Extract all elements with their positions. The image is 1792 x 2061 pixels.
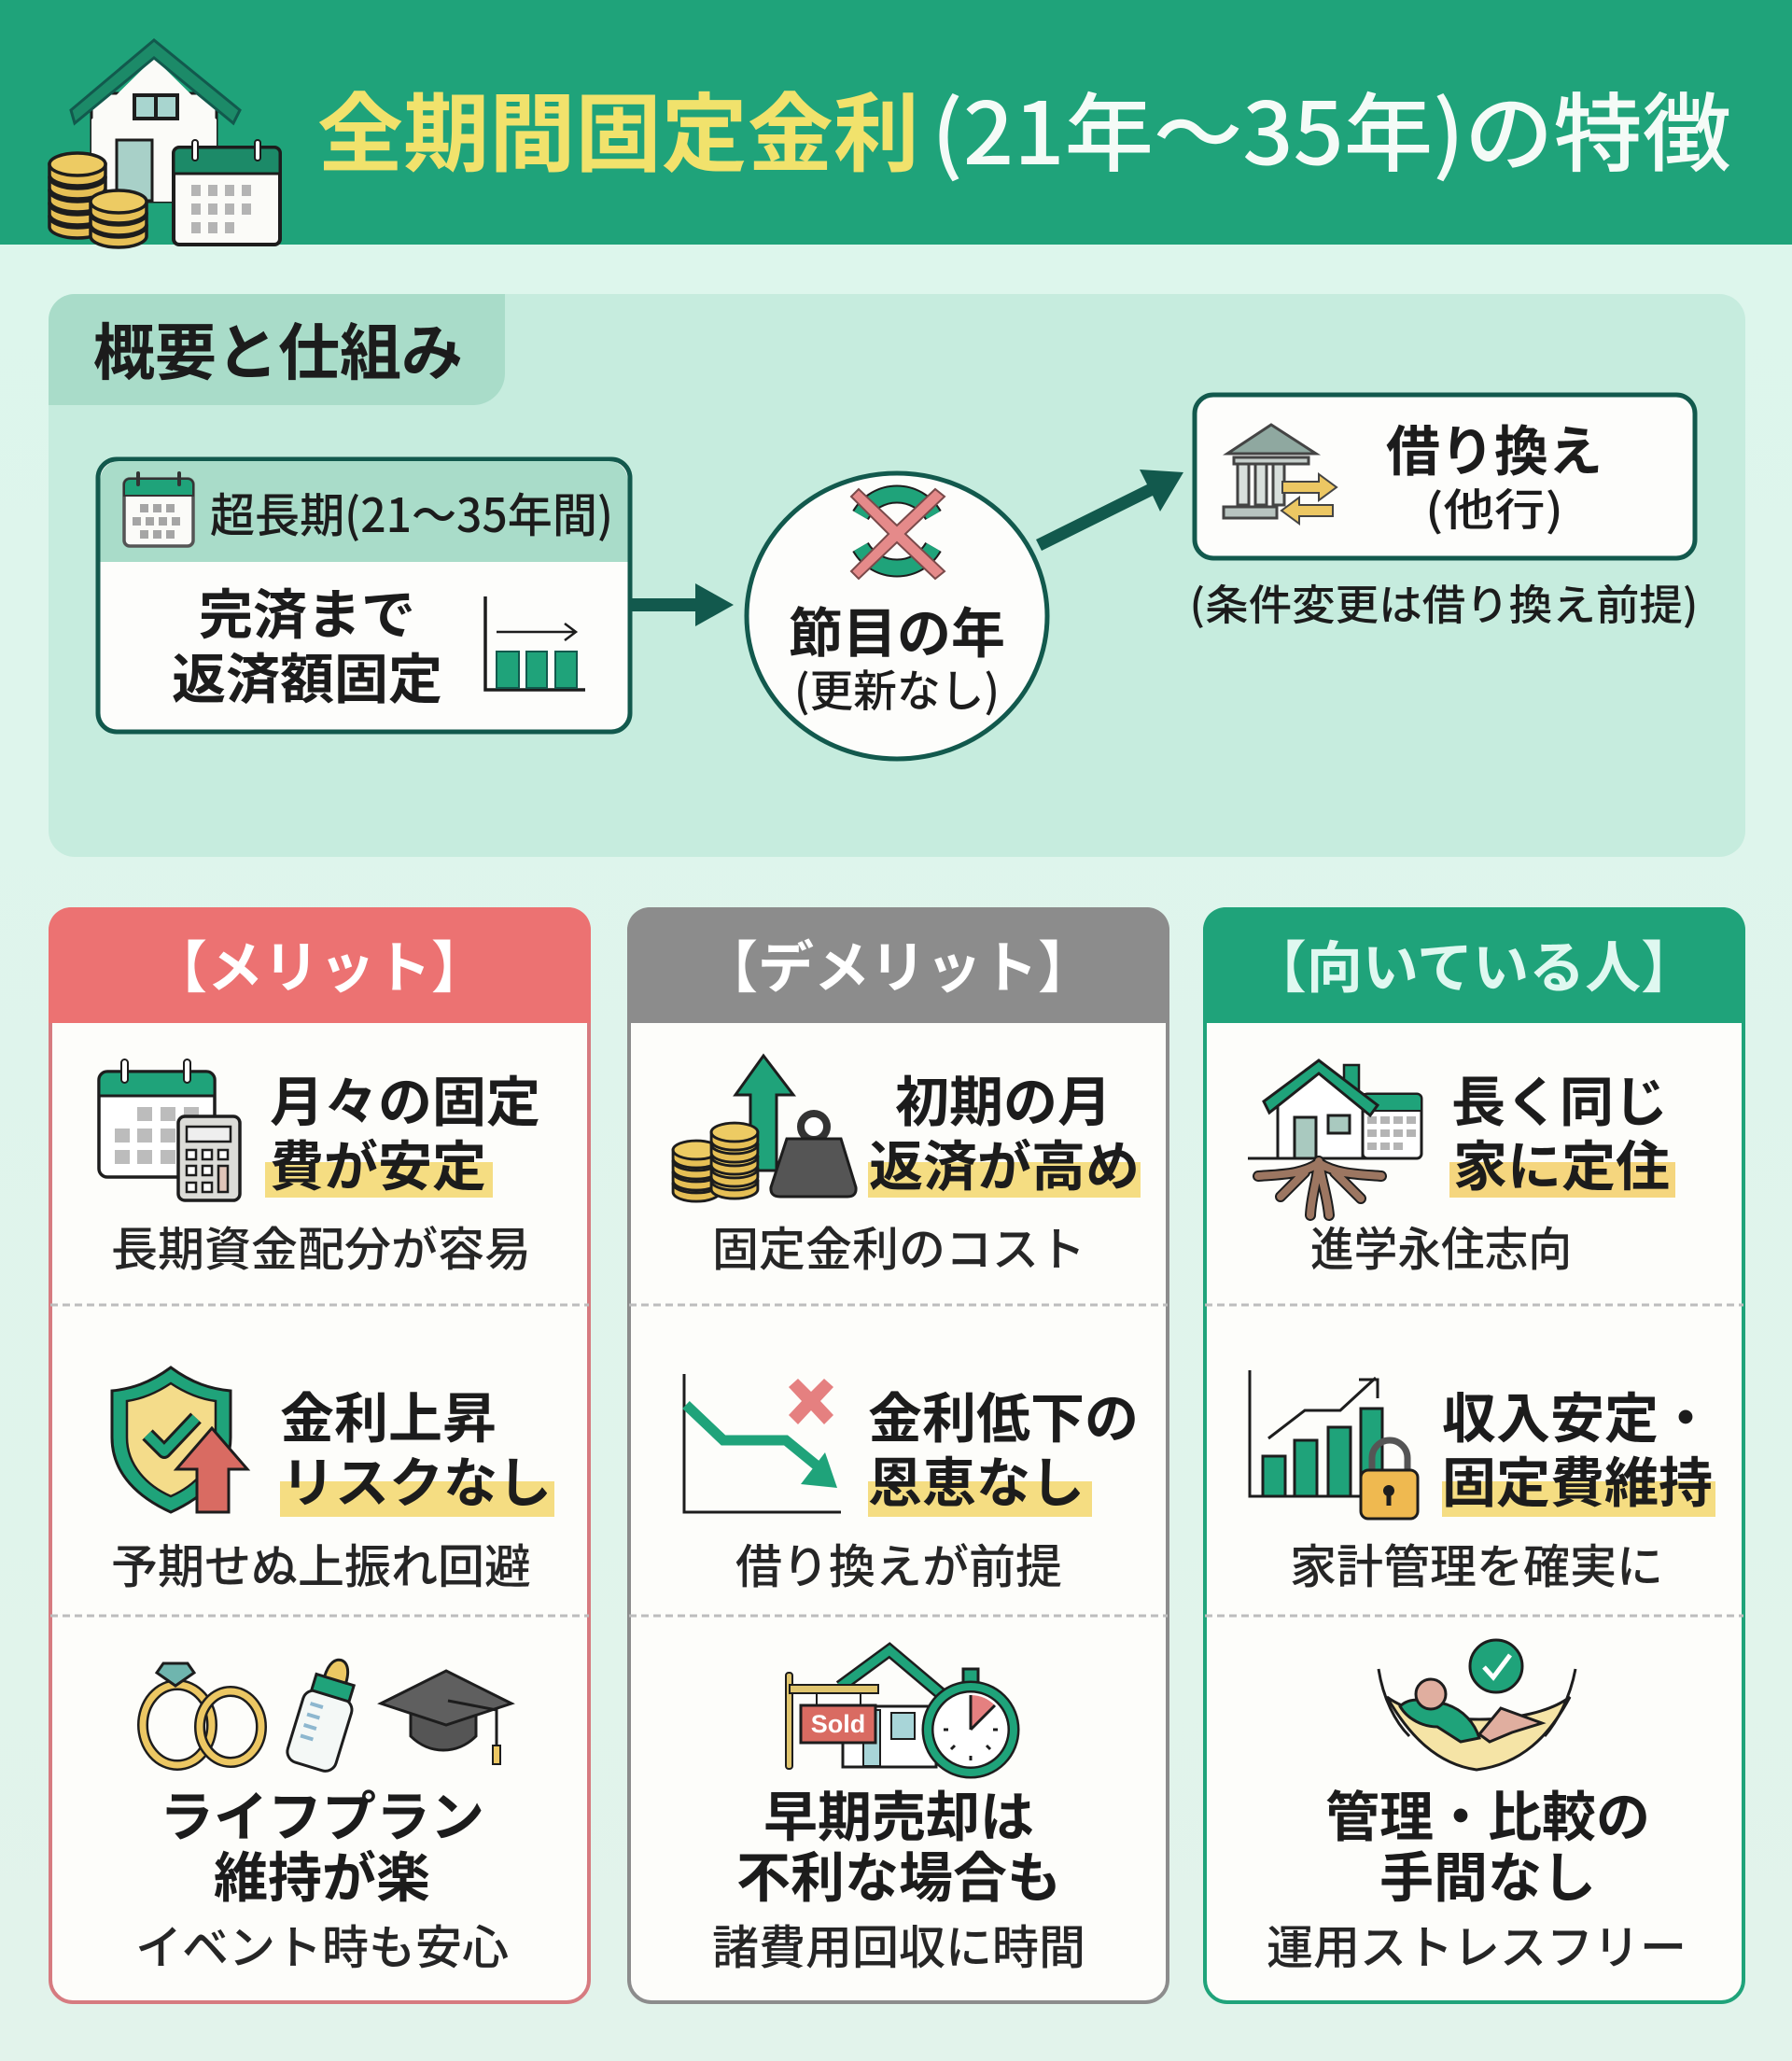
- icon: person relaxing in hammock: [1379, 1640, 1575, 1770]
- item title: [1449, 1059, 1675, 1201]
- column header: [49, 907, 591, 1023]
- item title: 手間なし: [1379, 1834, 1596, 1913]
- milestone label: 節目の年: [789, 590, 1005, 668]
- panel heading: 概要と仕組み: [49, 294, 505, 405]
- item title: 早期売却は: [763, 1774, 1034, 1852]
- item note: 長期資金配分が容易: [111, 1213, 531, 1280]
- box: refinance: [1195, 395, 1695, 558]
- item: stable monthly costs: [99, 1059, 540, 1280]
- item note: 固定金利のコスト: [712, 1213, 1085, 1280]
- item title: 管理・比較の: [1325, 1774, 1650, 1852]
- icon: house, coins and calendar: [49, 40, 280, 247]
- item title: [868, 1059, 1141, 1201]
- item note: 家計管理を確実に: [1290, 1530, 1663, 1597]
- item title: [280, 1375, 554, 1518]
- item title: [160, 1774, 484, 1913]
- item title: 維持が楽: [214, 1834, 430, 1913]
- icon: sold sign, house, stopwatch: [786, 1650, 1014, 1773]
- icon: coins, rising arrow, weight: [673, 1056, 856, 1201]
- item title: ライフプラン: [160, 1774, 484, 1852]
- icon: rings, baby bottle, graduation cap: [143, 1653, 511, 1774]
- panel: demerits: [627, 907, 1169, 2002]
- item title: [265, 1059, 540, 1201]
- title: 全期間固定金利: [317, 65, 919, 189]
- arrow: to milestone: [631, 583, 734, 626]
- column header: 【メリット】: [151, 923, 487, 1004]
- box: long-term fixed repayment: [98, 459, 630, 732]
- icon: crossed-out renewal cycle: [851, 489, 945, 579]
- icon: sold sign, house, stopwatch: Sold: [811, 1710, 865, 1738]
- panel: overview and mechanism: [49, 294, 1745, 857]
- column header: 【向いている人】: [1251, 923, 1697, 1004]
- item title: [1325, 1774, 1650, 1913]
- item title: 収入安定・: [1442, 1375, 1713, 1453]
- item title: 返済が高め: [869, 1123, 1140, 1201]
- icon: bank with exchange arrows: [1224, 425, 1337, 524]
- box text: [172, 571, 442, 714]
- icon: rooted house with calendar: [1248, 1060, 1421, 1215]
- column header: 【デメリット】: [702, 923, 1094, 1004]
- item title: 長く同じ: [1451, 1059, 1668, 1137]
- item title: 初期の月: [895, 1059, 1112, 1137]
- item title: 金利上昇: [280, 1375, 497, 1453]
- item title: 月々の固定: [270, 1059, 540, 1137]
- milestone label: [789, 590, 1005, 720]
- item: early sale disadvantage: [712, 1650, 1085, 1978]
- caption: refinance note: (条件変更は借り換え前提): [1189, 571, 1699, 632]
- box text: (他行): [1425, 474, 1563, 539]
- item: no benefit from rate fall: [684, 1374, 1139, 1597]
- box text: 完済まで: [199, 571, 415, 650]
- milestone circle: [747, 473, 1047, 759]
- item: life plan: [135, 1653, 511, 1978]
- item note: 諸費用回収に時間: [712, 1911, 1085, 1978]
- item title: リスクなし: [281, 1439, 552, 1518]
- icon: rising chart with lock: [1250, 1370, 1418, 1519]
- item title: 恩恵なし: [868, 1439, 1085, 1518]
- title: (21年〜35年)の特徴: [931, 65, 1731, 189]
- item: no hassle: [1267, 1640, 1687, 1978]
- item note: イベント時も安心: [135, 1911, 509, 1978]
- item title: [868, 1375, 1139, 1518]
- icon: falling rate chart: [684, 1374, 841, 1512]
- item note: 進学永住志向: [1310, 1213, 1572, 1280]
- icon: shield with arrow: [112, 1367, 247, 1512]
- panel heading: 概要と仕組み: 概要と仕組み: [93, 303, 463, 393]
- item: no rate rise risk: [111, 1367, 554, 1597]
- header banner: [0, 0, 1792, 247]
- item title: [1442, 1375, 1715, 1518]
- item: stable income: [1250, 1370, 1715, 1597]
- item title: 金利低下の: [868, 1375, 1139, 1453]
- item title: [736, 1774, 1061, 1913]
- item note: 借り換えが前提: [735, 1530, 1062, 1597]
- item: high initial repayment: [673, 1056, 1141, 1280]
- item note: 運用ストレスフリー: [1267, 1911, 1687, 1978]
- milestone label: (更新なし): [794, 655, 1000, 720]
- box text: 借り換え: [1386, 408, 1603, 486]
- icon: flat bar chart: [485, 596, 585, 690]
- icon: calendar and calculator: [99, 1059, 240, 1200]
- item title: 固定費維持: [1442, 1439, 1713, 1518]
- column header: [1203, 907, 1745, 1023]
- item note: 予期せぬ上振れ回避: [111, 1530, 531, 1597]
- item title: 費が安定: [270, 1123, 486, 1201]
- item title: 家に定住: [1453, 1123, 1670, 1201]
- column header: [627, 907, 1169, 1023]
- item title: 不利な場合も: [736, 1834, 1061, 1913]
- arrow: to refinance: [1036, 470, 1183, 551]
- item: settle in one home: [1248, 1059, 1675, 1280]
- box text: [1386, 408, 1603, 539]
- panel: suitable people: [1203, 907, 1745, 2002]
- box text: 返済額固定: [172, 636, 442, 714]
- icon: calendar: [124, 473, 193, 546]
- title: [317, 65, 1731, 189]
- box heading: 超長期(21〜35年間): [210, 479, 613, 546]
- panel: merits: [49, 907, 591, 2002]
